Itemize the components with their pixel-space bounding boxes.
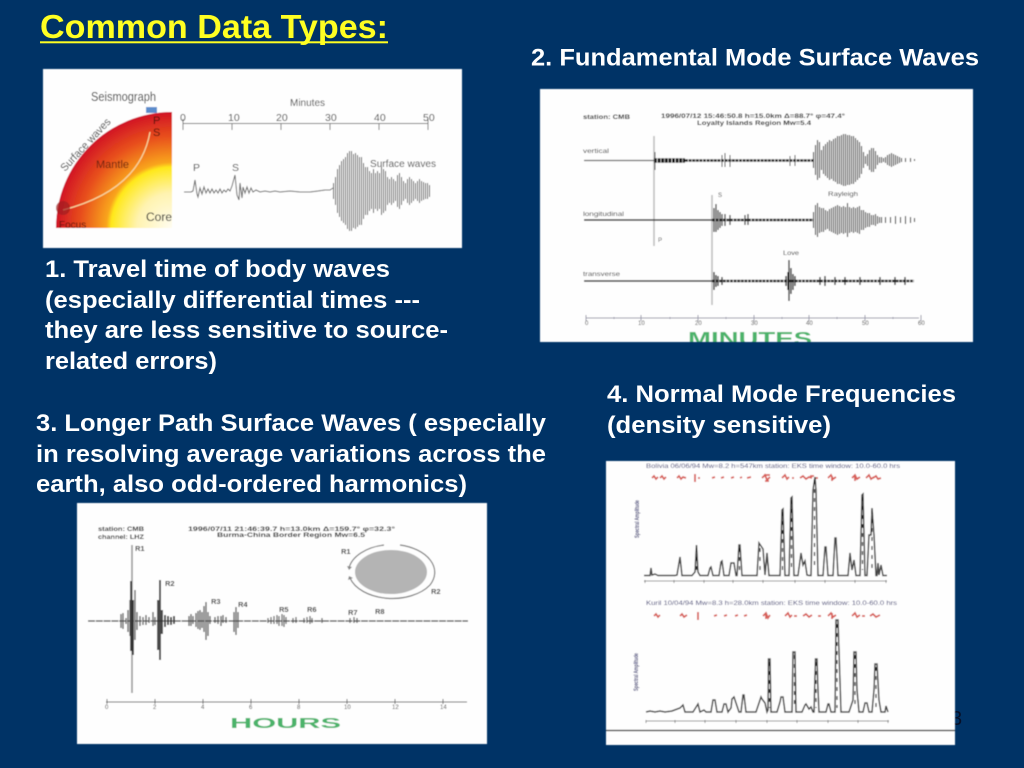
time axis: 6 xyxy=(249,705,253,711)
seismogram with R1 to R8 arrivals: R8 xyxy=(375,607,385,616)
time axis: 10 xyxy=(638,321,645,327)
text block: 3. longer path surface waves: 3. Longer Path Surface Waves ( especially xyxy=(36,410,547,437)
seismogram with P, S and surface waves: S xyxy=(232,162,239,174)
spectrum: bottom event: Spectral Amplitude xyxy=(634,653,640,691)
time axis: 40 xyxy=(806,321,813,327)
time axis in minutes: 40 xyxy=(374,112,386,124)
text block: 3. longer path surface waves: earth, also odd-ordered harmonics) xyxy=(36,471,467,498)
trace: longitudinal: longitudinal xyxy=(583,212,624,218)
seismogram header text: channel: LHZ xyxy=(98,535,144,541)
spectrum: top event: Spectral Amplitude xyxy=(635,500,641,538)
text block: 1. travel time of body waves xyxy=(45,256,448,375)
title: Common Data Types: xyxy=(40,8,388,45)
time axis: 8 xyxy=(297,705,301,711)
seismogram with R1 to R8 arrivals: R6 xyxy=(307,605,317,614)
trace: longitudinal xyxy=(583,192,914,305)
seismogram with R1 to R8 arrivals: R2 xyxy=(165,579,175,588)
time axis in minutes: 20 xyxy=(276,112,288,124)
time axis xyxy=(585,315,925,327)
seismogram header text: 1996/07/12 15:46:50.8 h=15.0km Δ=88.7° φ=47.4° xyxy=(661,114,846,120)
time axis in minutes xyxy=(180,98,435,130)
seismogram with P, S and surface waves: Surface waves xyxy=(370,159,436,170)
divider line across spectrum panel xyxy=(606,730,955,732)
text block: 4. normal mode frequencies: (density sensitive) xyxy=(607,412,831,439)
icon: earth cross-section: Mantle xyxy=(96,159,129,171)
seismogram header text: Loyalty Islands Region Mw=5.4 xyxy=(697,121,812,127)
icon: earth cross-section: P xyxy=(153,115,160,127)
diagram: earth with orbit paths R1 and R2: R2 xyxy=(431,587,441,596)
seismogram with R1 to R8 arrivals: R5 xyxy=(279,605,289,614)
trace: longitudinal: Rayleigh xyxy=(828,192,858,198)
seismogram with R1 to R8 arrivals: R1 xyxy=(135,544,145,553)
seismogram with P, S and surface waves: P xyxy=(193,162,200,174)
spectrum: top event xyxy=(635,464,900,583)
seismogram with R1 to R8 arrivals: R4 xyxy=(238,600,248,609)
text block: 3. longer path surface waves: in resolving average variations across the xyxy=(36,441,546,468)
axis title: minutes: MINUTES xyxy=(688,329,812,349)
diagram: earth with orbit paths R1 and R2: R1 xyxy=(341,547,351,556)
panel: normal mode spectra xyxy=(606,461,955,745)
seismogram header text: Burma-China Border Region Mw=6.5 xyxy=(217,533,366,539)
time axis in minutes: 30 xyxy=(325,112,337,124)
trace: transverse: Love xyxy=(783,251,800,257)
trace: longitudinal: S xyxy=(718,193,722,199)
text block: 4. normal mode frequencies: 4. Normal Mode Frequencies xyxy=(607,381,956,408)
time axis xyxy=(105,699,467,711)
seismogram header text: 1996/07/11 21:46:39.7 h=13.0km Δ=159.7° φ=32.3° xyxy=(188,527,396,533)
seismogram with P, S and surface waves xyxy=(184,151,436,231)
time axis: 2 xyxy=(153,705,157,711)
seismogram with R1 to R8 arrivals: R7 xyxy=(348,608,358,617)
seismogram header text xyxy=(98,527,396,541)
icon: earth cross-section: S xyxy=(153,127,160,139)
slide number: 3 xyxy=(951,708,962,730)
time axis: 20 xyxy=(695,321,702,327)
icon: earth cross-section: Seismograph xyxy=(91,90,156,104)
seismogram header text: station: CMB xyxy=(583,115,631,121)
seismogram header text xyxy=(583,114,846,127)
panel: seismograph diagram xyxy=(43,69,462,248)
time axis: 50 xyxy=(862,321,869,327)
icon: earth cross-section xyxy=(56,90,172,231)
trace: transverse xyxy=(583,251,914,301)
time axis in minutes: 0 xyxy=(180,112,186,124)
heading: 2. fundamental mode surface waves: 2. Fundamental Mode Surface Waves xyxy=(531,44,979,72)
time axis: 0 xyxy=(105,705,109,711)
axis title: hours: HOURS xyxy=(230,715,341,732)
time axis: 10 xyxy=(344,705,351,711)
seismogram header text: station: CMB xyxy=(98,527,145,533)
trace: vertical: vertical xyxy=(583,149,609,155)
panel: longer path seismogram xyxy=(77,503,487,744)
panel: fundamental mode seismograms xyxy=(540,89,973,349)
time axis in minutes: 10 xyxy=(228,112,240,124)
time axis: 30 xyxy=(751,321,758,327)
text block: 4. normal mode frequencies xyxy=(607,381,956,439)
spectrum: top event: Bolivia 06/06/94 Mw=8.2 h=547km station: EKS time window: 10.0-60.0 hrs xyxy=(646,464,900,470)
diagram: earth with orbit paths R1 and R2 xyxy=(341,545,441,598)
trace: longitudinal: P xyxy=(658,238,662,244)
text block: 1. travel time of body waves: (especially differential times --- xyxy=(45,287,420,314)
time axis in minutes: Minutes xyxy=(290,98,325,109)
icon: earth cross-section: Focus xyxy=(59,220,86,231)
time axis: 14 xyxy=(440,705,447,711)
text block: 1. travel time of body waves: 1. Travel time of body waves xyxy=(45,256,390,283)
icon: earth cross-section: Surface waves xyxy=(58,116,114,174)
icon: earth cross-section: Core xyxy=(146,210,172,224)
trace: transverse: transverse xyxy=(583,272,621,278)
time axis: 4 xyxy=(201,705,205,711)
spectrum: bottom event xyxy=(634,601,897,723)
text block: 1. travel time of body waves: related errors) xyxy=(45,348,217,375)
time axis in minutes: 50 xyxy=(423,112,435,124)
trace: vertical xyxy=(583,134,914,246)
seismogram with R1 to R8 arrivals: R3 xyxy=(211,597,221,606)
time axis: 12 xyxy=(392,705,399,711)
text block: 3. longer path surface waves xyxy=(36,410,547,498)
time axis: 0 xyxy=(585,321,589,327)
time axis: 60 xyxy=(918,321,925,327)
seismogram with R1 to R8 arrivals xyxy=(88,544,468,693)
text block: 1. travel time of body waves: they are less sensitive to source- xyxy=(45,317,448,344)
spectrum: bottom event: Kuril 10/04/94 Mw=8.3 h=28.0km station: EKS time window: 10.0-60.0 hrs xyxy=(646,601,897,607)
